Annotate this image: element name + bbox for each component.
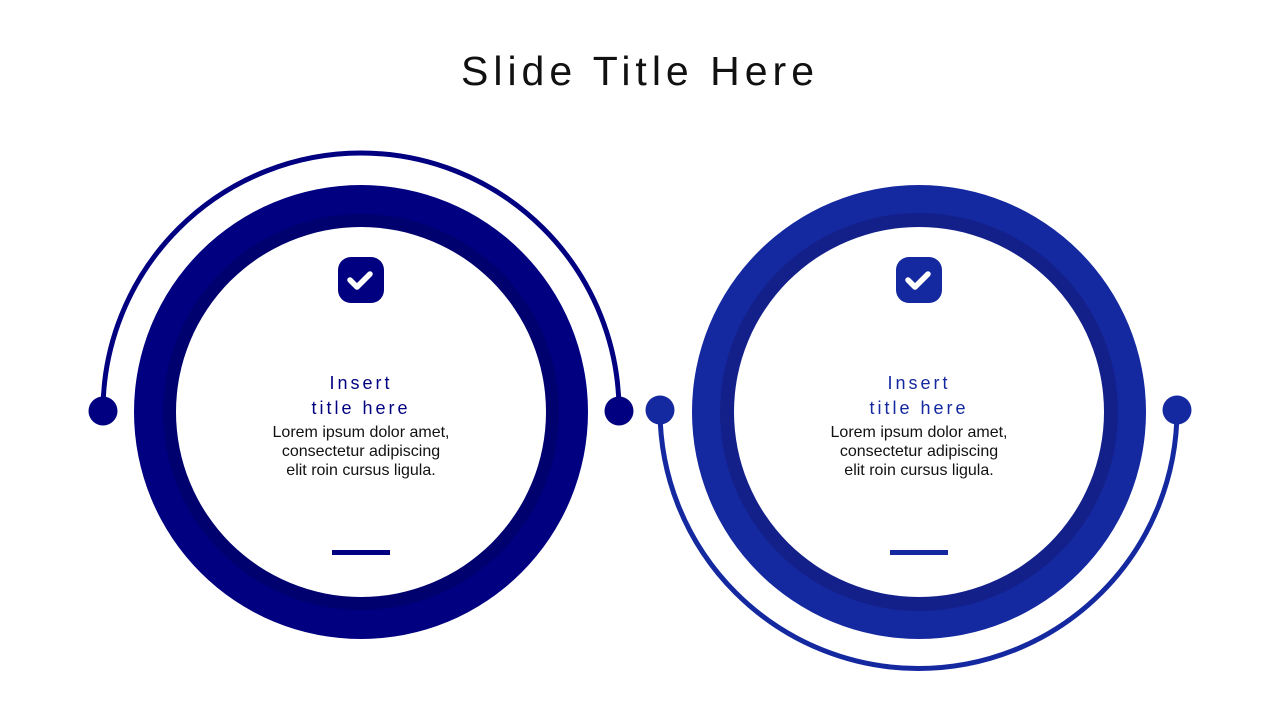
arc: right bottom <box>660 410 1177 668</box>
text block: right: consectetur adipiscing <box>840 443 998 460</box>
title: Slide Title Here <box>461 48 819 94</box>
text block: right: Lorem ipsum dolor amet, <box>831 424 1007 441</box>
text block: left: elit roin cursus ligula. <box>286 462 436 479</box>
icon: check <box>338 257 384 303</box>
text block: left: consectetur adipiscing <box>282 443 440 460</box>
text block: right: elit roin cursus ligula. <box>844 462 994 479</box>
text block: right: title here <box>869 398 969 418</box>
panel: left ring <box>88 153 634 639</box>
text block: left: Lorem ipsum dolor amet, <box>273 424 449 441</box>
arc: left top <box>103 153 619 411</box>
dash <box>890 550 948 555</box>
text block: right <box>831 373 1007 479</box>
dot left <box>88 396 118 426</box>
text block: right: Insert <box>887 373 951 393</box>
text block: left <box>273 373 449 479</box>
icon: check <box>896 257 942 303</box>
text block: left: Insert <box>329 373 393 393</box>
dot right <box>1162 396 1192 424</box>
panel: right ring <box>646 185 1192 668</box>
dash <box>332 550 390 555</box>
text block: left: title here <box>311 398 411 418</box>
dot left <box>646 396 674 424</box>
dot right <box>604 396 634 426</box>
